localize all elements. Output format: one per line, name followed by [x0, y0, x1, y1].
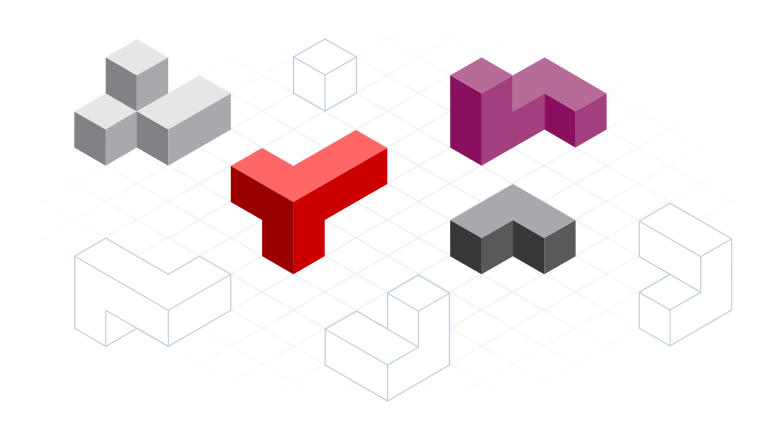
- wireframe single cube: [294, 39, 356, 111]
- dark gray solid block shape: [450, 184, 576, 274]
- magenta solid block shape: [450, 57, 607, 166]
- background isometric grid: [74, 44, 701, 384]
- red solid block shape: [231, 130, 387, 274]
- wireframe L-shaped block, bottom center: [325, 275, 449, 401]
- wireframe hook-shaped block, right: [639, 203, 732, 346]
- light gray solid block shape: [74, 39, 231, 166]
- wireframe N-shaped block: [75, 238, 231, 346]
